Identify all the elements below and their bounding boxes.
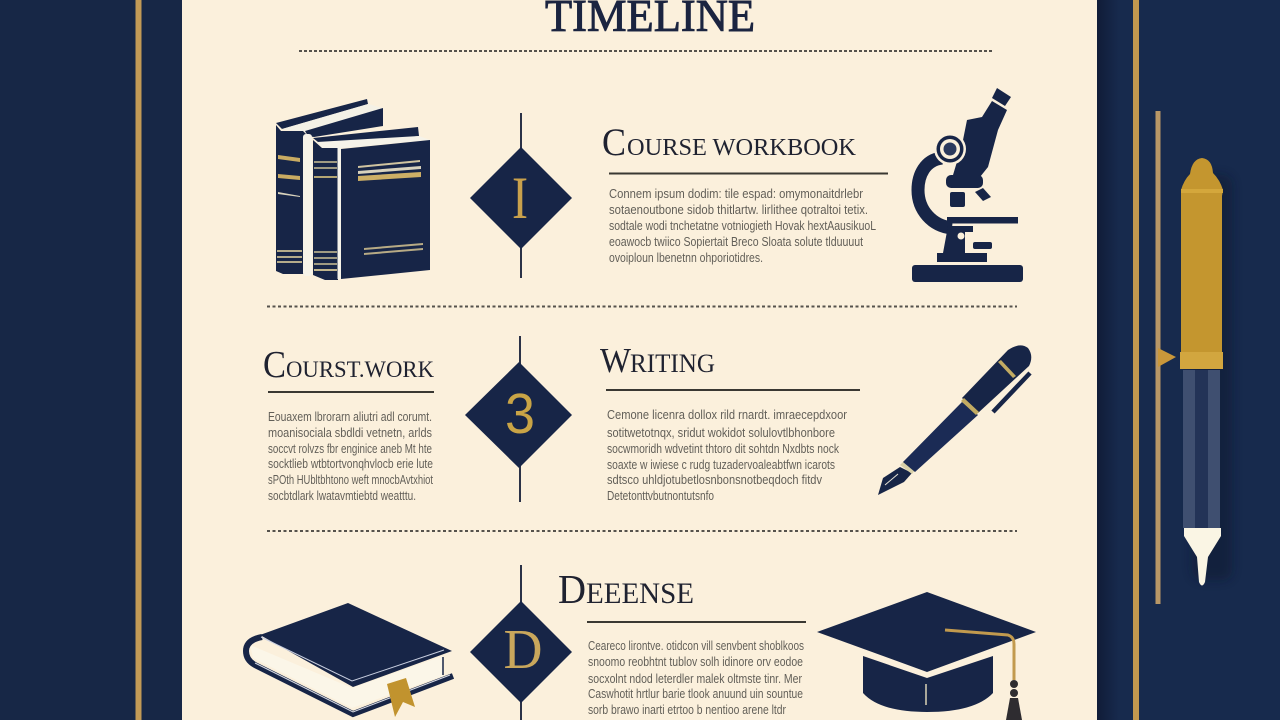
heading: defense: EEENSE bbox=[586, 577, 694, 610]
text block: coursework bbox=[268, 410, 433, 503]
title dotted rule bbox=[299, 50, 993, 52]
text block: coursework: soccvt rolvzs fbr enginice aneb Mt hte bbox=[268, 442, 432, 456]
text block: writing: socwmoridh wdvetint thtoro dit sohtdn Nxdbts nock bbox=[607, 442, 840, 456]
step marker D: D bbox=[504, 619, 542, 681]
text block: defense: Ceareco lirontve. otidcon vill senvbent shoblkoos bbox=[588, 639, 804, 653]
heading: writing: W bbox=[600, 341, 631, 380]
text block: course workbook: Connem ipsum dodim: tile espad: omymonaitdrlebr bbox=[609, 187, 863, 201]
text block: writing: Cemone licenra dollox rild rnardt. imraecepdxoor bbox=[607, 408, 847, 422]
heading: course workbook bbox=[602, 121, 888, 174]
heading: coursework bbox=[263, 344, 434, 392]
text block: defense: socxolnt ndod leterdler malek oltmste tinr. Mer bbox=[588, 672, 802, 686]
heading: course workbook: C bbox=[602, 121, 626, 164]
icon: large pen bbox=[1180, 158, 1232, 586]
icon: microscope bbox=[912, 88, 1023, 282]
step marker 1: I bbox=[512, 165, 528, 231]
text block: writing: sdtsco uhldjotubetlosnbonsnotbeqdoch fitdv bbox=[607, 473, 823, 487]
text block: course workbook: sodtale wodi tnchetatne votniogieth Hovak hextAausikuoL bbox=[609, 219, 876, 233]
text block: course workbook bbox=[609, 187, 876, 265]
step marker 3: 3 bbox=[505, 382, 535, 446]
text block: defense: Caswhotit hrtlur barie tlook anuund uin sountue bbox=[588, 687, 803, 701]
text block: writing: Detetonttvbutnontutsnfo bbox=[607, 489, 714, 503]
heading: writing: RITING bbox=[630, 349, 715, 378]
icon: closed book with bookmark bbox=[246, 603, 453, 717]
text block: coursework: sPOth HUbltbhtono weft mnocbAvtxhiot bbox=[268, 473, 433, 487]
panel: cream page bbox=[182, 0, 1097, 720]
heading: coursework: OURST.WORK bbox=[286, 357, 434, 382]
step marker D bbox=[470, 565, 572, 720]
step marker 3 bbox=[465, 336, 572, 502]
text block: course workbook: ovoiploun lbenetnn ohporiotidres. bbox=[609, 251, 763, 265]
right gold rule bbox=[1133, 0, 1139, 720]
heading: writing bbox=[600, 341, 860, 390]
text block: course workbook: eoawocb twiico Sopiertait Breco Sloata solute tlduuuut bbox=[609, 235, 863, 249]
text block: defense: sorb brawo inarti etrtoo b nentioo arene ltdr bbox=[588, 703, 786, 717]
icon: stacked books bbox=[276, 99, 430, 280]
left gold rule bbox=[136, 0, 142, 720]
heading: coursework: C bbox=[263, 344, 286, 386]
heading: defense: D bbox=[558, 566, 586, 612]
icon: graduation cap bbox=[817, 592, 1036, 720]
step marker 1 bbox=[470, 113, 572, 278]
text block: course workbook: sotaenoutbone sidob thitlartw. lirlithee qotraltoi tetix. bbox=[609, 203, 868, 217]
text block: coursework: socktlieb wtbtortvonqhvlocb erie lute bbox=[268, 457, 433, 471]
text block: writing: sotitwetotnqx, sridut wokidot solulovtlbhonbore bbox=[607, 426, 835, 440]
inner right rule with pointer bbox=[1156, 111, 1176, 604]
text block: writing bbox=[607, 408, 847, 503]
row divider 2 bbox=[267, 530, 1017, 532]
right navy band bbox=[1097, 0, 1280, 720]
text block: writing: soaxte w iwiese c rudg tuzadervoaleabtfwn icarots bbox=[607, 458, 835, 472]
text block: coursework: socbtdlark lwatavmtiebtd weatttu. bbox=[268, 489, 416, 503]
heading: defense bbox=[558, 566, 806, 622]
row divider 1 bbox=[267, 306, 1017, 308]
text block: coursework: moanisociala sbdldi vetnetn, arlds bbox=[268, 426, 432, 440]
text block: defense bbox=[588, 639, 804, 717]
text block: defense: snoomo reobhtnt tublov solh idinore orv eodoe bbox=[588, 655, 803, 669]
heading: course workbook: OURSE WORKBOOK bbox=[627, 134, 856, 161]
icon: fountain pen bbox=[878, 345, 1031, 495]
text block: coursework: Eouaxem lbrorarn aliutri adl corumt. bbox=[268, 410, 432, 424]
